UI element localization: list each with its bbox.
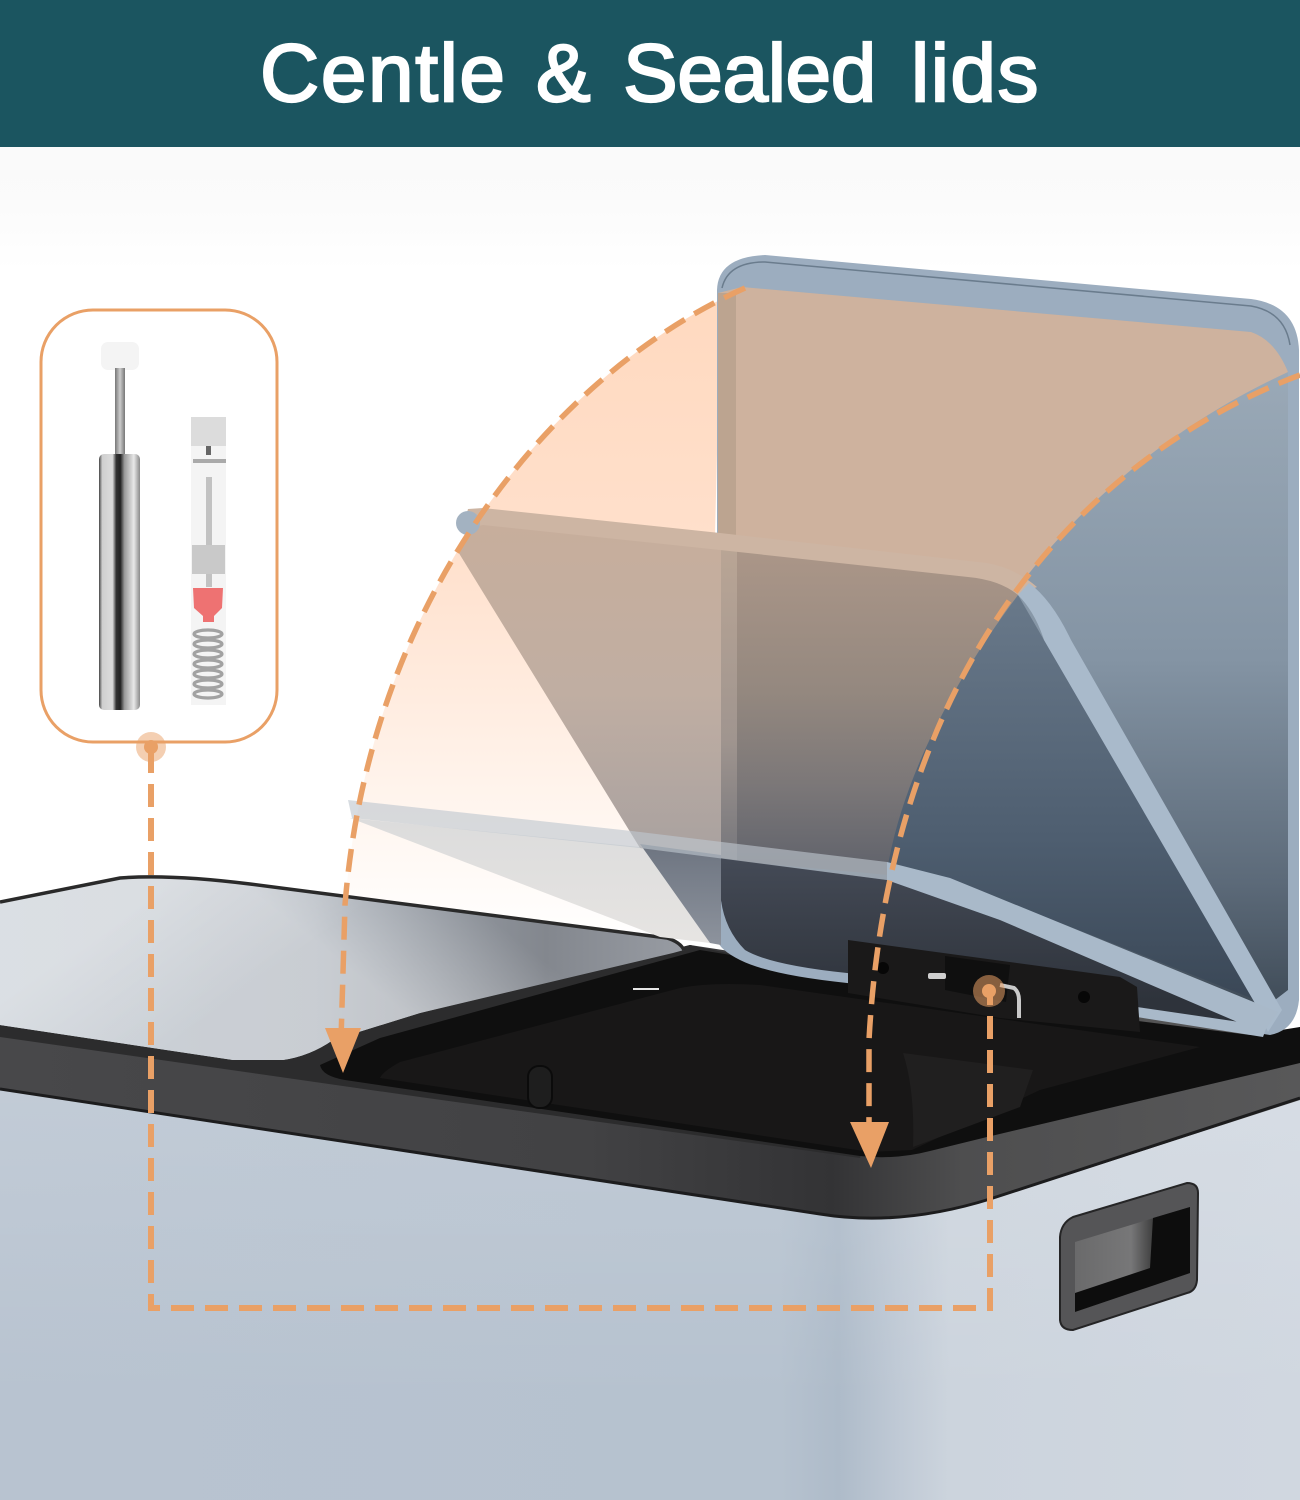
mid lid corner	[456, 511, 480, 535]
dashed arc: lid inner travel	[869, 375, 1300, 1130]
arrow head: left	[325, 1028, 361, 1073]
mid lid top strip	[462, 508, 1037, 595]
bin body	[0, 1085, 1300, 1500]
cutaway piston	[192, 545, 225, 574]
lid inner panel	[718, 287, 1288, 1010]
mid lid left panel	[457, 522, 721, 860]
lid gloss	[0, 877, 684, 1060]
mid lid blue panel	[888, 595, 1256, 1000]
header banner	[0, 0, 1300, 147]
handle dark opening	[1075, 1207, 1190, 1312]
lid side seam	[718, 293, 736, 538]
title: Sealed	[623, 28, 876, 119]
dashed link from inset to hinge	[151, 750, 990, 1308]
cutaway rod	[206, 477, 212, 587]
open lid	[717, 255, 1299, 1035]
hinge bracket	[848, 940, 1140, 1032]
anchor dot: inset	[136, 732, 166, 762]
title: lids	[911, 28, 1040, 119]
lid outline	[0, 877, 684, 950]
inner dot	[144, 740, 158, 754]
mid lid blue band	[1018, 583, 1282, 1032]
white glint	[633, 988, 659, 990]
black rim	[0, 945, 1300, 1219]
rim top lip	[0, 945, 900, 1158]
inset callout: damper	[41, 310, 277, 742]
inner bucket	[380, 984, 1200, 1152]
lid top sheen	[0, 877, 684, 1060]
lid top edge highlight	[722, 262, 1290, 345]
orange tint on lid	[718, 287, 1288, 589]
mid position lid	[456, 508, 1282, 1032]
cutaway neck	[206, 446, 211, 455]
body top light	[0, 1085, 1300, 1400]
hinge screw holes	[877, 962, 889, 974]
bin opening	[320, 950, 1300, 1157]
strip corner	[1137, 1007, 1267, 1037]
cutaway seal	[193, 459, 226, 463]
handle recess	[1075, 1207, 1190, 1312]
lowest lid position strip	[348, 800, 1278, 1037]
hinge block	[945, 956, 1010, 1002]
lid underside dark	[721, 858, 1263, 1032]
anchor dot: hinge	[973, 975, 1005, 1007]
cutaway spring	[194, 630, 222, 698]
hinge spring	[1000, 985, 1019, 1018]
dashed arc: lid outer travel	[341, 288, 745, 1040]
bucket clip	[528, 1066, 552, 1108]
lowest lid position body	[350, 818, 710, 943]
lid swing arc fill	[345, 288, 745, 945]
damper cutaway	[191, 417, 226, 705]
strip solid right part	[887, 862, 1278, 1033]
arrow head: right	[850, 1122, 889, 1168]
mid lid right panel	[721, 548, 1018, 875]
hinge pin	[928, 973, 946, 979]
closed left lid	[0, 877, 684, 1060]
white damper piston	[99, 342, 140, 710]
title: &	[536, 28, 591, 119]
mid lid seam	[721, 550, 737, 862]
cutaway cap	[191, 417, 226, 446]
cutaway red seal	[193, 588, 223, 622]
rim lower line	[0, 1089, 1300, 1218]
inner bucket flap	[903, 1053, 1033, 1147]
piston cylinder	[99, 454, 140, 710]
mid lid lower left panel	[640, 844, 721, 945]
title: Centle	[260, 28, 507, 119]
piston rod	[115, 368, 125, 456]
side handle	[1060, 1183, 1198, 1330]
inner dot	[982, 984, 996, 998]
